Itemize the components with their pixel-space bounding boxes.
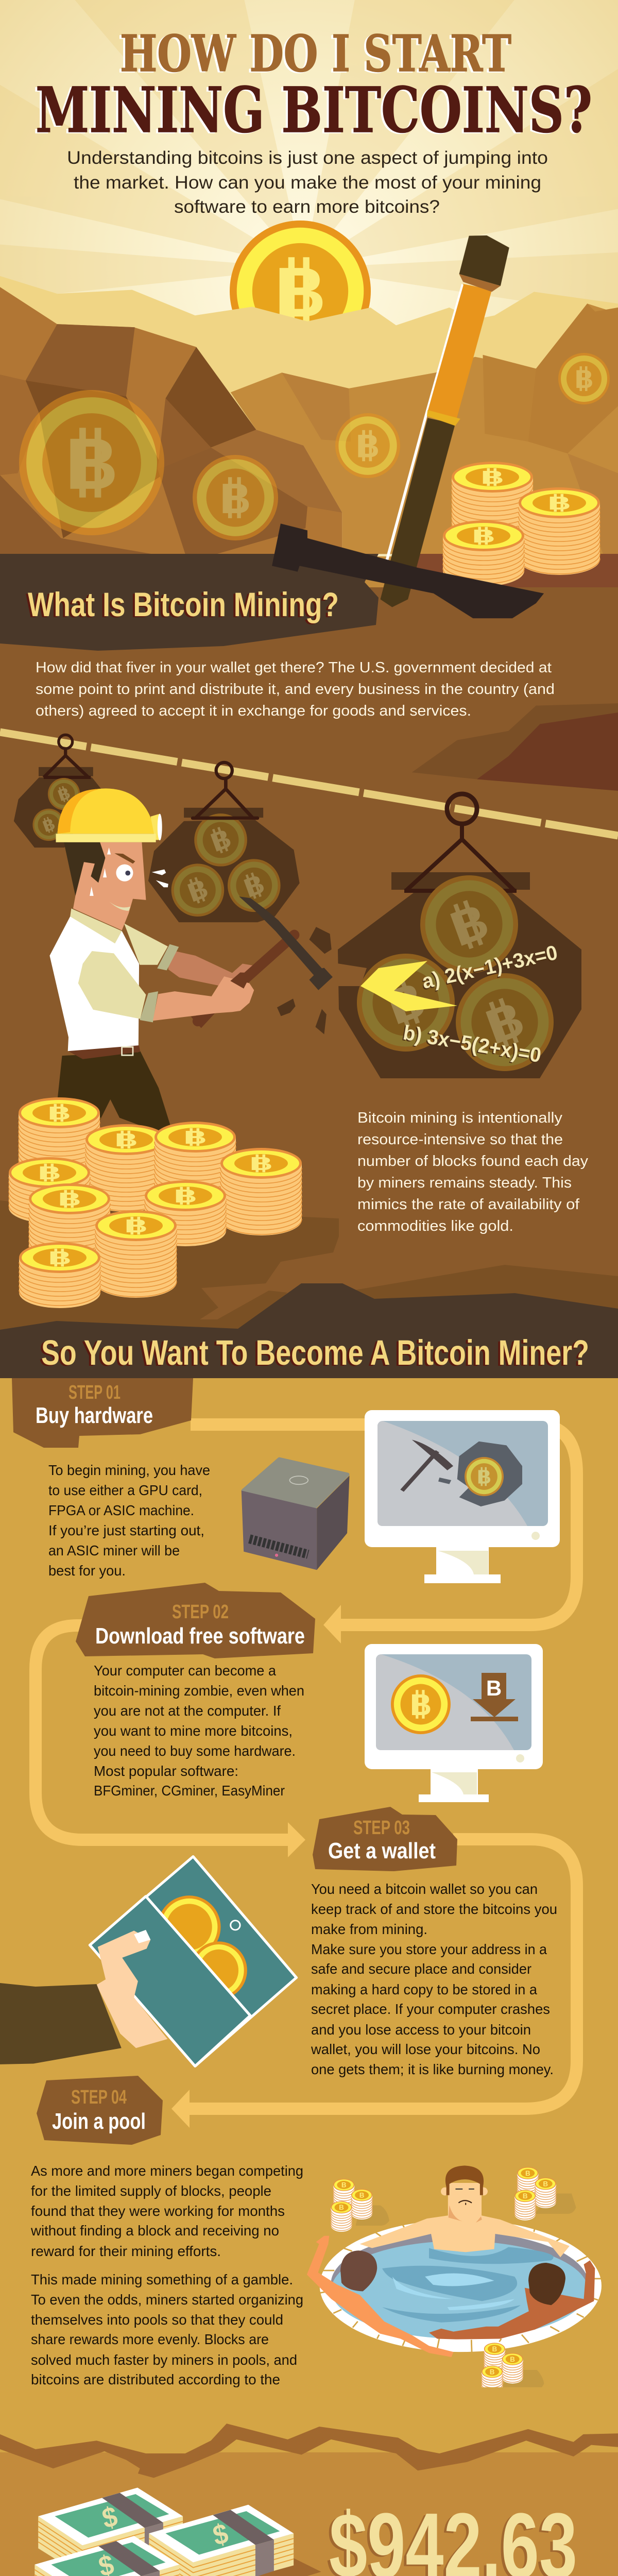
sky sunburst background: [0, 0, 618, 556]
mining explanation text: by miners remains steady. This: [357, 1175, 572, 1191]
step 04 text: solved much faster by miners in pools, and: [31, 2352, 297, 2368]
panel: large bucket with equations: [337, 794, 581, 1078]
heading: what is bitcoin mining: What Is Bitcoin Mining?: [28, 585, 339, 623]
intro text: the market. How can you make the most of your mining: [74, 173, 541, 193]
step 02 text: you want to mine more bitcoins,: [94, 1723, 293, 1739]
step 02 text: you need to buy some hardware.: [94, 1743, 296, 1759]
icon: monitor with download: B: [486, 1676, 502, 1700]
icon: rising bitcoin: [230, 221, 371, 362]
panel: hero: [0, 0, 618, 587]
stats background: [0, 2452, 618, 2576]
step 03 text: safe and secure place and consider: [311, 1961, 531, 1977]
step 01 text: an ASIC miner will be: [48, 1543, 180, 1558]
step 03 text: and you lose access to your bitcoin: [311, 2022, 531, 2038]
step 01 text: [48, 1462, 210, 1579]
coin stacks: [443, 462, 600, 586]
step 01 text: FPGA or ASIC machine.: [48, 1502, 194, 1518]
step 02 text: Most popular software:: [94, 1763, 238, 1779]
icons: faded bitcoins: [19, 353, 610, 540]
step 03 text: making a hard copy to be stored in a: [311, 1981, 537, 1997]
heading band: [0, 1283, 618, 1378]
step 04 text: As more and more miners began competing: [31, 2163, 303, 2179]
step 03 text: keep track of and store the bitcoins you: [311, 1901, 557, 1917]
steps background: [0, 1378, 618, 2476]
step 03 text: make from mining.: [311, 1921, 427, 1937]
step 01 text: To begin mining, you have: [48, 1462, 210, 1478]
step 02 text: [94, 1663, 304, 1799]
miner figure: [49, 788, 333, 1131]
step 02 badge: STEP 02: [172, 1601, 229, 1623]
intro paragraph: [36, 659, 555, 719]
panel: statistics: [0, 2387, 618, 2576]
rock with coins: [338, 890, 581, 1078]
icon: money stacks: [35, 2488, 321, 2576]
step 04 badge: STEP 04: [71, 2087, 127, 2108]
step 02 text: BFGminer, CGminer, EasyMiner: [94, 1783, 285, 1799]
step 03 badge: [313, 1807, 457, 1871]
step 03 badge: Get a wallet: [328, 1838, 436, 1863]
coin piles: [331, 2167, 576, 2396]
intro text: Understanding bitcoins is just one aspect of jumping into: [67, 148, 548, 168]
coin stacks by miner: [9, 1097, 302, 1308]
intro text: [67, 148, 548, 217]
equation a: a) 2(x−1)+3x=0: [420, 941, 560, 993]
step 01 text: to use either a GPU card,: [48, 1482, 202, 1498]
tub: [320, 2219, 602, 2352]
step 03 text: [311, 1881, 557, 2077]
icon: monitor with pick: [365, 1410, 560, 1583]
step 03 text: one gets them; it is like burning money.: [311, 2061, 554, 2077]
step 02 text: you are not at the computer. If: [94, 1703, 281, 1719]
panel: steps: [0, 1283, 618, 2476]
rope: [0, 732, 618, 836]
left bather: [307, 2236, 454, 2357]
step 04 text: without finding a block and receiving no: [30, 2223, 279, 2239]
step 02 badge: Download free software: [95, 1623, 305, 1649]
step 01 badge: Buy hardware: [36, 1403, 153, 1428]
mining explanation text: mimics the rate of availability of: [357, 1196, 580, 1213]
rock crack: [337, 963, 367, 986]
step 04 text: bitcoins are distributed according to the: [31, 2371, 280, 2387]
icon: wallet and hand: [0, 1857, 297, 2066]
small bucket left: [14, 735, 101, 848]
step 04 text: themselves into pools so that they could: [31, 2312, 283, 2328]
step 04 badge: [37, 2076, 163, 2145]
foreground rocks: [0, 1200, 618, 1340]
intro paragraph: some point to print and distribute it, and every business in the country (and: [36, 681, 555, 698]
step 04 badge: Join a pool: [52, 2109, 146, 2134]
step 01 badge: [12, 1378, 193, 1448]
intro paragraph: others) agreed to accept it in exchange for goods and services.: [36, 703, 471, 719]
rock chips: [277, 927, 332, 1035]
step 03 badge: STEP 03: [353, 1817, 410, 1839]
mining explanation text: resource-intensive so that the: [357, 1131, 563, 1148]
panel: what is bitcoin mining: [0, 235, 618, 1381]
right bather: [429, 2260, 595, 2340]
step 04 text: To even the odds, miners started organizing: [31, 2292, 303, 2308]
step 04 text: [30, 2163, 303, 2408]
mining explanation text: number of blocks found each day: [357, 1153, 589, 1170]
mining explanation text: Bitcoin mining is intentionally: [357, 1110, 563, 1126]
step 01 text: If you’re just starting out,: [48, 1522, 204, 1538]
background rocks: [412, 703, 618, 791]
bucket bar and hook: [391, 794, 530, 891]
title: HOW DO I START: [120, 24, 511, 83]
heading band: [0, 554, 379, 651]
section background: [0, 587, 618, 1381]
crack dividers: [0, 2387, 618, 2576]
step 02 text: bitcoin-mining zombie, even when: [94, 1683, 304, 1699]
step 03 text: You need a bitcoin wallet so you can: [311, 1881, 538, 1897]
step 03 text: Make sure you store your address in a: [311, 1941, 547, 1957]
mountains: [0, 276, 618, 554]
step 02 text: Your computer can become a: [94, 1663, 276, 1679]
step 04 text: share rewards more evenly. Blocks are: [31, 2331, 269, 2347]
title: [36, 24, 592, 147]
icon: ASIC box: [242, 1459, 350, 1570]
step 04 text: reward for their mining efforts.: [31, 2243, 221, 2259]
step 04 text: for the limited supply of blocks, people: [31, 2183, 271, 2199]
icon: hot tub with miners: [307, 2165, 602, 2396]
red rock band: [412, 554, 618, 587]
icon: monitor with download: [365, 1644, 543, 1802]
pickaxe: [272, 235, 544, 618]
central bather: [360, 2165, 570, 2257]
step 03 text: wallet, you will lose your bitcoins. No: [311, 2041, 540, 2057]
intro text: software to earn more bitcoins?: [174, 197, 440, 217]
step 02 badge: [76, 1583, 315, 1658]
intro paragraph: How did that fiver in your wallet get there? The U.S. government decided at: [36, 659, 552, 676]
mining explanation text: commodities like gold.: [357, 1218, 513, 1234]
flow arrows: [36, 1425, 577, 2128]
step 03 text: secret place. If your computer crashes: [311, 2001, 550, 2017]
step 04 text: amount of work each person put in.: [31, 2392, 251, 2408]
middle bucket: [148, 762, 300, 922]
mining explanation text: [357, 1110, 589, 1234]
step 01 text: best for you.: [48, 1563, 126, 1579]
equation b: b) 3x−5(2+x)=0: [401, 1021, 543, 1067]
glint: [360, 961, 457, 1011]
step 04 text: This made mining something of a gamble.: [31, 2272, 293, 2287]
step 04 text: found that they were working for months: [31, 2203, 285, 2219]
panel: miner and buckets: [14, 735, 333, 1131]
step 01 badge: STEP 01: [68, 1382, 121, 1403]
